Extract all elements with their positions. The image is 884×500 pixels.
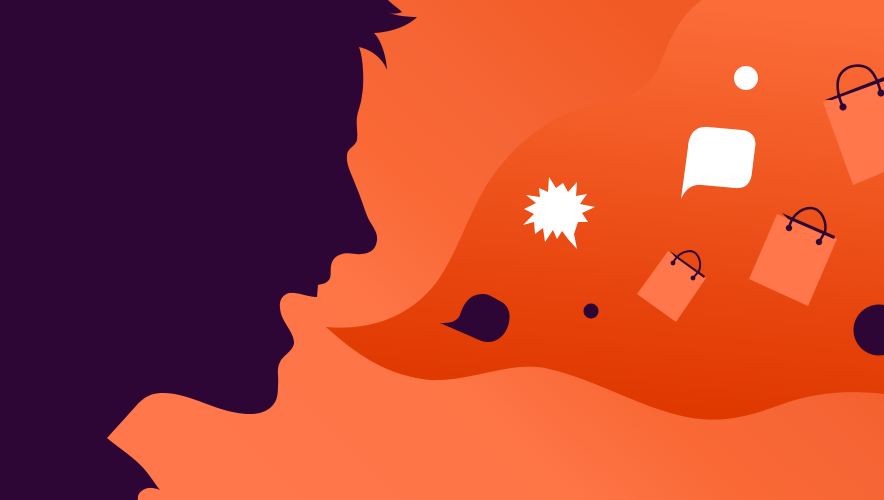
small dark dot [584, 304, 598, 318]
shopping bag: right [823, 66, 884, 185]
flame thought shape [326, 0, 884, 420]
head silhouette [0, 0, 417, 500]
shopping bag: small [637, 251, 706, 322]
large dark circle [854, 304, 884, 356]
white circle [734, 66, 758, 90]
white speech bubble [681, 127, 755, 199]
shopping bag: middle [749, 208, 837, 306]
white starburst [523, 177, 595, 249]
dark speech bubble [440, 294, 510, 342]
